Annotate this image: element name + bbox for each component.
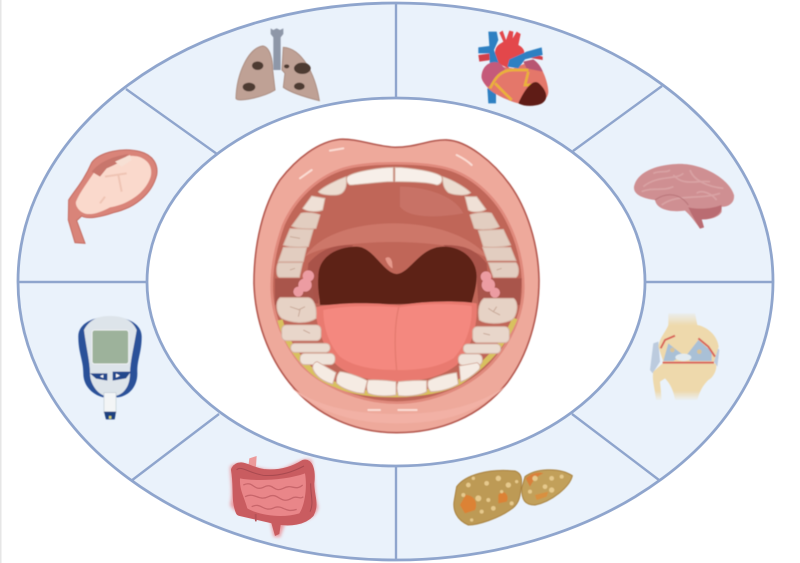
uvula bbox=[385, 257, 393, 268]
tongue bbox=[315, 302, 477, 382]
vena cava bbox=[487, 88, 496, 103]
icon: lungs bbox=[236, 28, 319, 101]
icon: fatty liver bbox=[454, 470, 572, 525]
tibia bbox=[653, 363, 716, 400]
great vessels bbox=[478, 52, 543, 62]
throat bbox=[318, 247, 477, 305]
test strip bbox=[104, 393, 116, 413]
fibula and ligament bbox=[650, 342, 719, 373]
upper teeth bbox=[277, 167, 518, 277]
icon: inflamed intestine bbox=[230, 456, 318, 537]
icon: glucose meter bbox=[78, 316, 142, 419]
tonsils bbox=[293, 270, 500, 298]
icon: brain bbox=[634, 164, 734, 229]
lower teeth bbox=[277, 298, 517, 396]
heart body bbox=[482, 60, 548, 105]
palate bbox=[400, 187, 463, 216]
trachea bbox=[271, 28, 283, 70]
cartilage bbox=[663, 340, 712, 361]
femur bbox=[658, 313, 719, 362]
icon: heart bbox=[478, 31, 548, 106]
icon: knee joint bbox=[650, 313, 719, 400]
screen bbox=[92, 330, 129, 364]
lips bbox=[254, 139, 539, 433]
icon: fetus in uterus bbox=[68, 150, 157, 243]
inflammation glow bbox=[230, 459, 318, 537]
small intestine bbox=[240, 473, 306, 516]
buttons bbox=[90, 373, 107, 381]
plaque along the lower gum bbox=[280, 318, 515, 395]
icon: open mouth bbox=[254, 139, 539, 433]
mouth cavity bbox=[272, 163, 523, 403]
large intestine bbox=[235, 464, 312, 521]
cheek walls bbox=[275, 278, 522, 305]
